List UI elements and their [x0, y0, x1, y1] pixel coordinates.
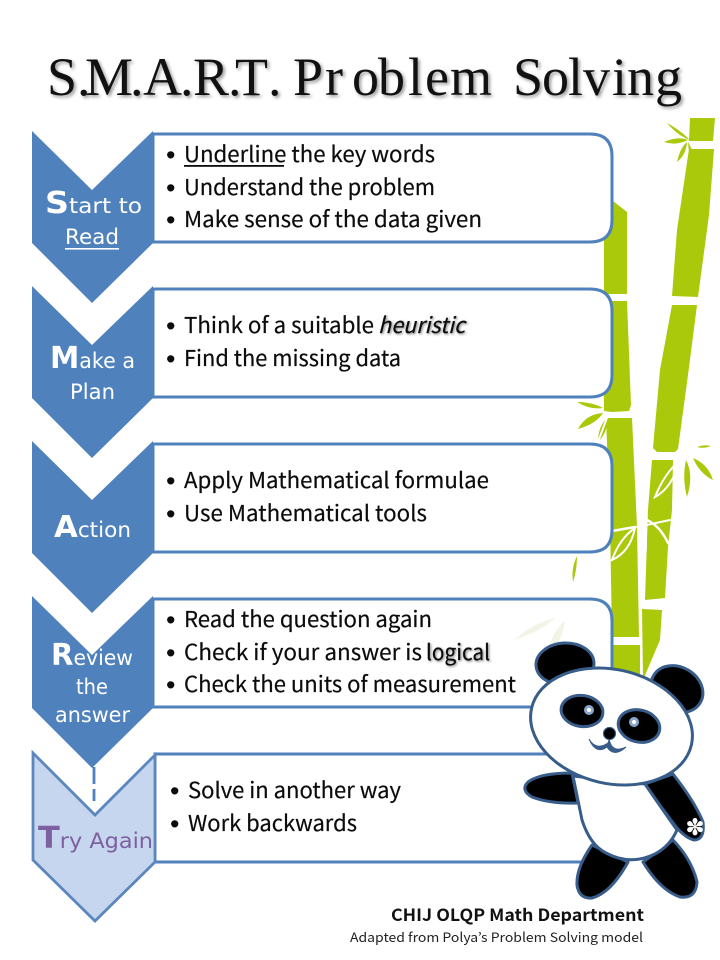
panda head: [519, 653, 704, 800]
step 2 box: [153, 289, 612, 397]
step 4 box: •: [166, 605, 175, 635]
step 1 box: •: [166, 140, 175, 170]
credit text: Adapted from Polya’s Problem Solving model: [350, 927, 643, 946]
step 5 box: •: [170, 809, 179, 839]
bamboo illustration: [572, 118, 715, 680]
step 5 chevron: Try Again: [33, 753, 155, 921]
step 2 box: Find the missing data: [184, 341, 401, 373]
step 1 chevron: Start to Read: Start to: [45, 186, 142, 221]
step 2 chevron: Make a Plan: Plan: [70, 380, 115, 404]
step 3 box: Apply Mathematical formulae: [184, 463, 489, 495]
step 4 chevron: Review the answer: Review: [51, 638, 133, 673]
step 5 box: Solve in another way: [188, 773, 402, 805]
step 4 chevron: Review the answer: [32, 596, 153, 768]
panda nose and mouth: [589, 728, 626, 752]
step 3 box: Use Mathematical tools: [184, 496, 427, 528]
step 4 box: [153, 599, 612, 707]
step 2 box: •: [166, 344, 175, 374]
step 5 box: Work backwards: [188, 806, 357, 838]
step 4 box: Check if your answer is: [184, 635, 422, 667]
left bamboo stalk: [604, 190, 640, 680]
step 1 box: [153, 134, 612, 242]
step 2 box: •: [166, 311, 175, 341]
step 3 box: •: [166, 499, 175, 529]
step 4 box: •: [166, 670, 175, 700]
step 4 box: logical: [426, 635, 490, 667]
step 1 box: •: [166, 173, 175, 203]
panda legs: [577, 840, 697, 898]
step 4 box: Check the units of measurement: [184, 667, 516, 699]
step 2 box: heuristic: [378, 308, 468, 340]
step 4 box: Read the question again: [184, 602, 432, 634]
step 2 box: Think of a suitable: [184, 308, 374, 340]
step 4 chevron: Review the answer: answer: [55, 703, 130, 727]
step 1 box: Understand the problem: [184, 170, 435, 202]
step 5 box: [155, 754, 612, 862]
credit text: [350, 901, 644, 946]
step 5 box: •: [170, 776, 179, 806]
panda eyes: [559, 693, 663, 747]
dashed connector arrow: [93, 767, 95, 801]
step 1 chevron: Start to Read: [32, 131, 153, 303]
white leaf highlights on bamboo: [598, 415, 680, 565]
step 3 chevron: Action: Action: [54, 510, 131, 545]
step 2 chevron: Make a Plan: Make a: [50, 341, 135, 376]
step 3 box: •: [166, 466, 175, 496]
bamboo leaves: [572, 123, 713, 582]
panda ears: [535, 642, 711, 722]
panda body: [573, 776, 677, 860]
credit text: CHIJ OLQP Math Department: [391, 901, 644, 926]
step 4 chevron: Review the answer: the: [76, 675, 108, 699]
step 1 box: Make sense of the data given: [184, 202, 482, 234]
icon: panda mascot: [519, 642, 711, 898]
step 3 box: [153, 444, 612, 552]
right bamboo stalk: [642, 118, 715, 680]
step 5 chevron: Try Again: Try Again: [38, 821, 153, 856]
step 1 chevron: Start to Read: Read: [65, 225, 119, 249]
step 1 box: •: [166, 205, 175, 235]
step 4 box: •: [166, 638, 175, 668]
step 3 chevron: Action: [32, 441, 153, 613]
panda paw flower: ✽: [685, 815, 705, 841]
step 2 chevron: Make a Plan: [32, 286, 153, 458]
step 1 box: Underline the key words: [184, 137, 435, 169]
title: S.M.A.R.T.ProblemSolving: [47, 47, 682, 107]
panda arms: [525, 773, 703, 840]
